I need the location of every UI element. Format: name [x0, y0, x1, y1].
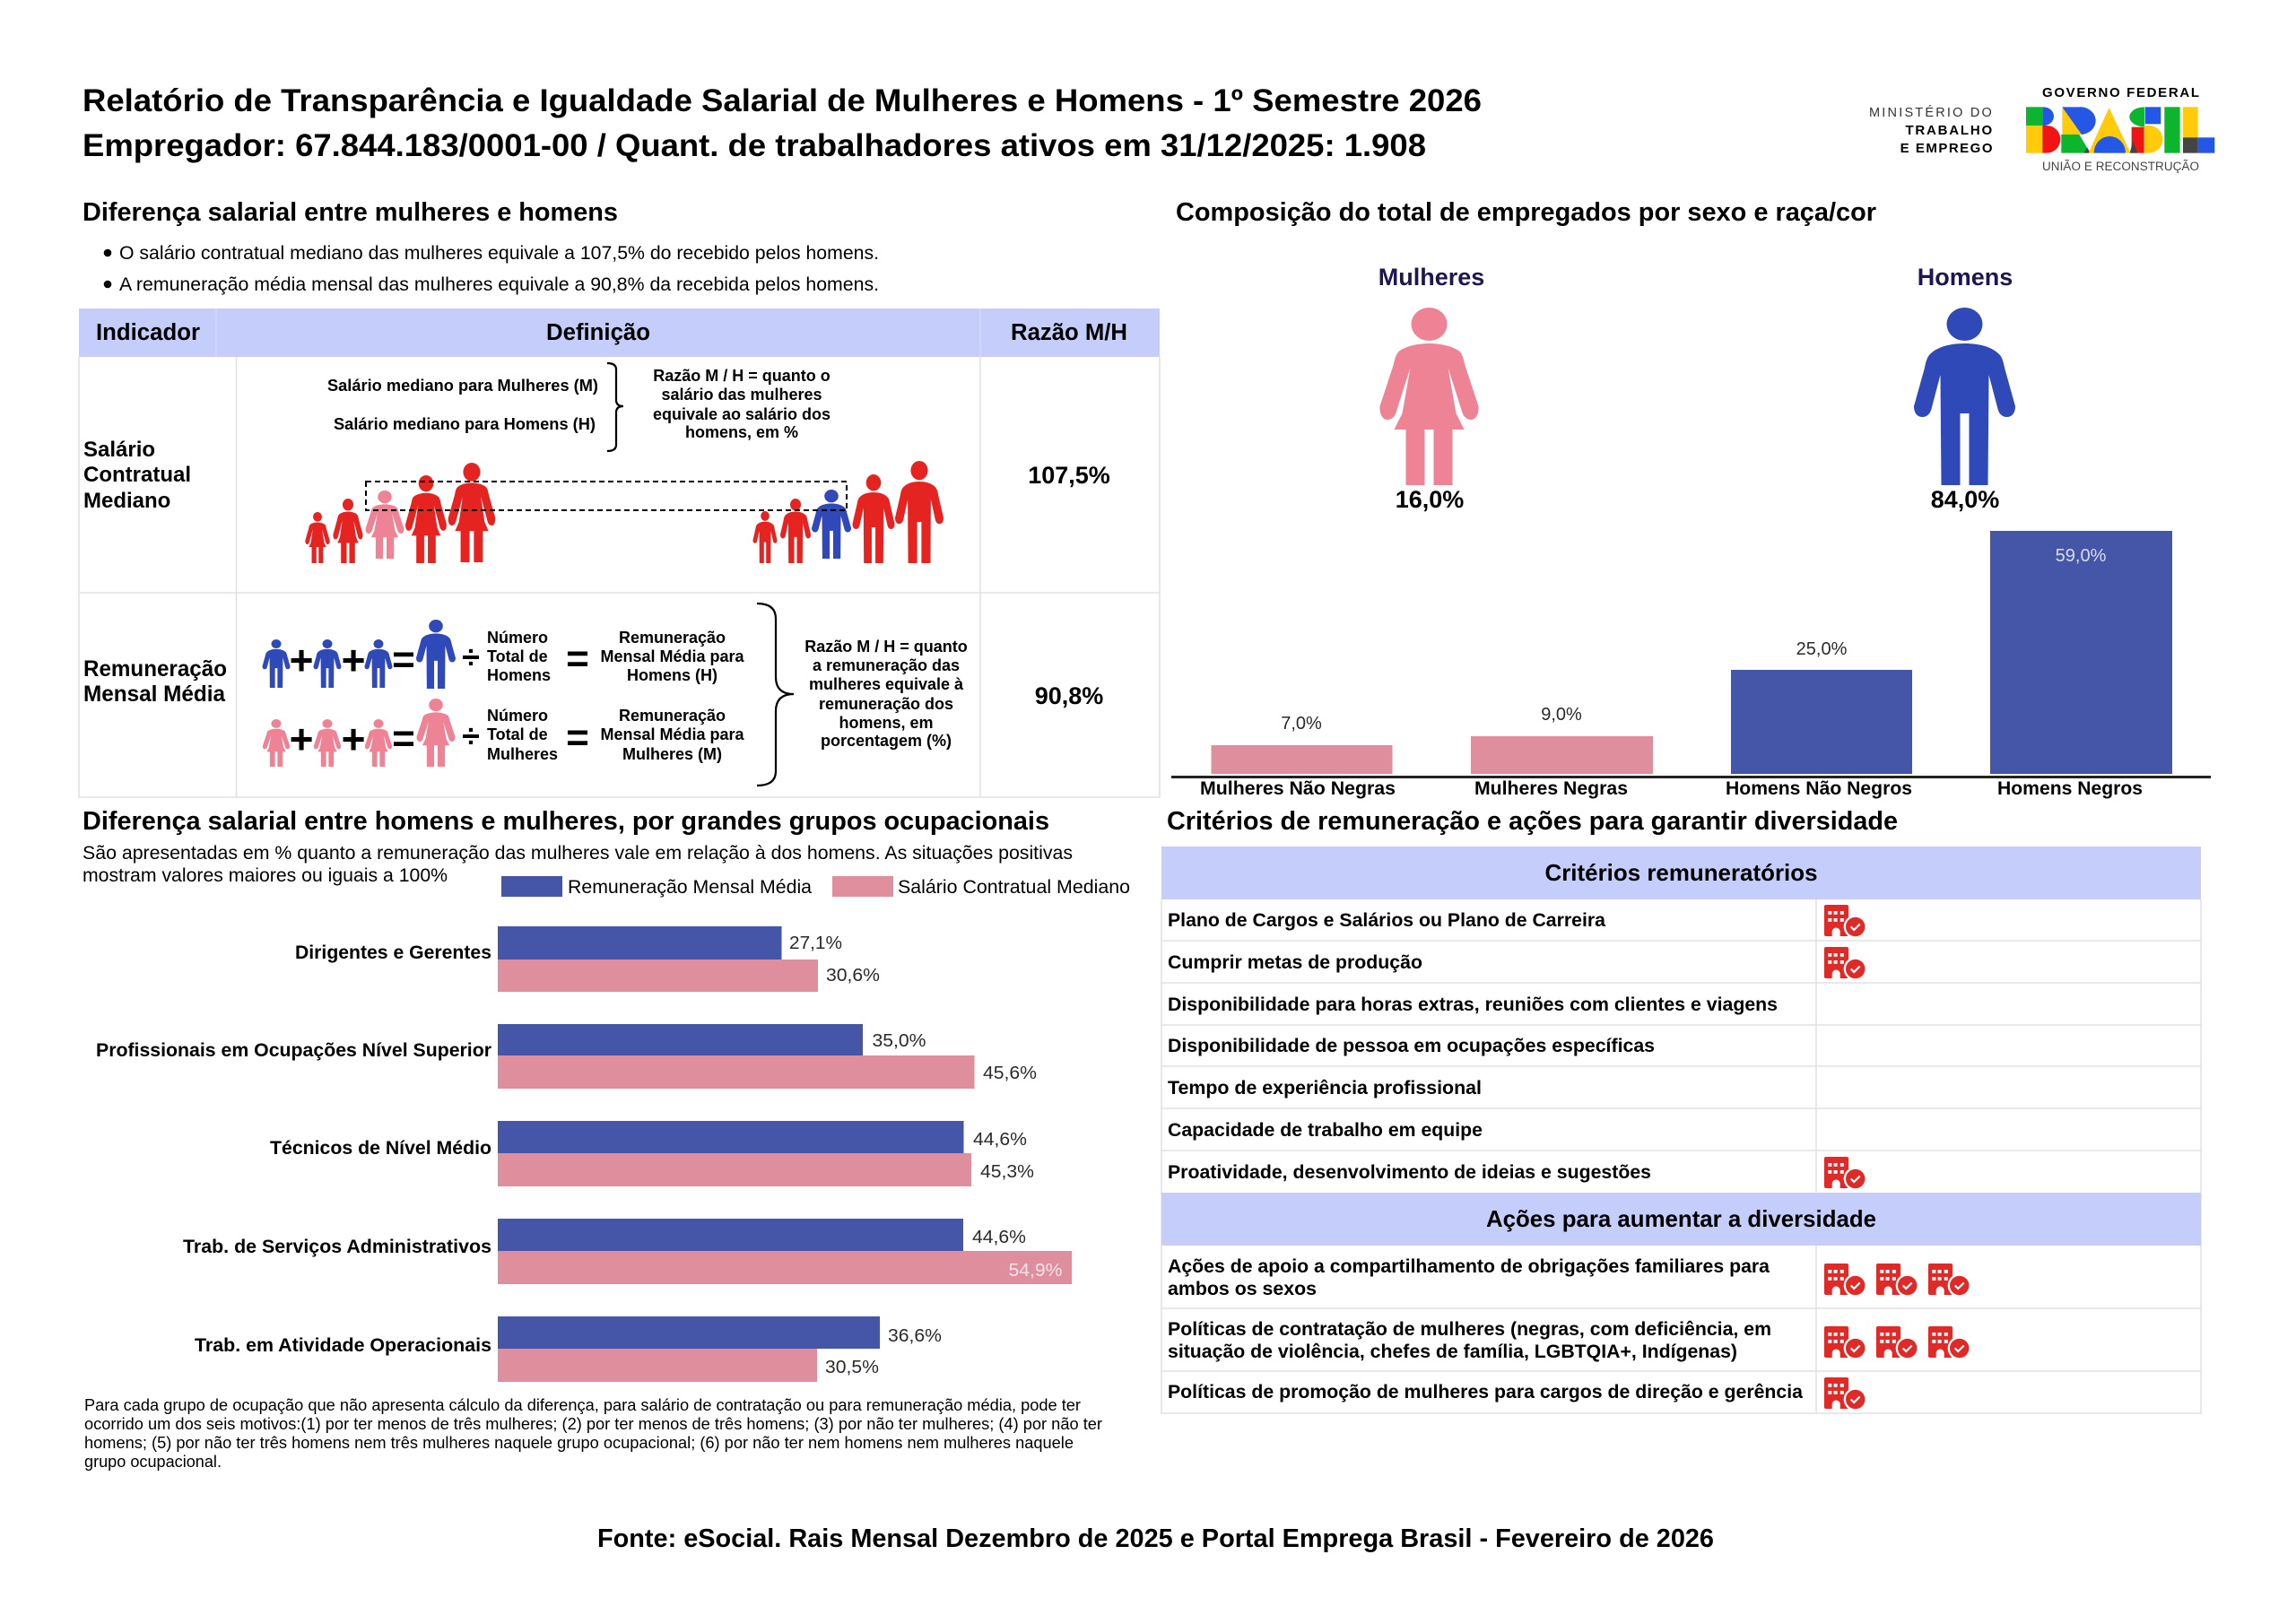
bar chart: composição por raça/cor: 9,0% [1541, 705, 1582, 725]
pictogram: mulheres: Mulheres [1378, 264, 1484, 291]
footnote: Para cada grupo de ocupação que não apresenta cálculo da diferença, para salário de contratação ou para remuneração média, pode ter [84, 1396, 1081, 1414]
row: experiência: Tempo de experiência profissional [1168, 1078, 1482, 1099]
equation: men: = [392, 638, 415, 682]
group: serviços administrativos [183, 1219, 1072, 1284]
bar chart: composição por raça/cor: 25,0% [1796, 639, 1848, 659]
row: metas de produção: Cumprir metas de produção [1168, 952, 1422, 973]
row: plano de cargos: Plano de Cargos e Salários ou Plano de Carreira [1168, 910, 1605, 931]
bar chart: composição por raça/cor: 59,0% [2056, 546, 2107, 566]
row: contratação: situação de violência, chefes de família, LGBTQIA+, Indígenas) [1168, 1342, 1737, 1362]
equation: women: = [392, 716, 415, 760]
ratio explanation: remuneration [804, 638, 968, 750]
pictogram: homens: Homens [1918, 264, 2013, 291]
logo: Ministério do Trabalho e Emprego [1869, 105, 1994, 156]
row: horas extras: Disponibilidade para horas extras, reuniões com clientes e viagens [1168, 994, 1778, 1015]
header: critérios remuneratórios: Critérios remuneratórios [1544, 859, 1817, 886]
equation: women: ÷ [462, 717, 480, 754]
group: técnicos: Técnicos de Nível Médio [270, 1137, 491, 1159]
legend: Remuneração Mensal Média [568, 877, 812, 898]
panel: critérios table [1161, 847, 2201, 1413]
logo: Ministério do Trabalho e Emprego: MINISTÉRIO DO [1869, 105, 1994, 120]
chart description [83, 843, 1073, 886]
equation: men: Homens [487, 666, 551, 684]
equation: women: Total de [487, 725, 548, 743]
title: Relatório de Transparência e Igualdade Salarial de Mulheres e Homens - 1º Semestre 2026 [83, 83, 1482, 118]
ratio explanation: salary: equivale ao salário dos [653, 405, 831, 423]
row label: salário contratual mediano: Mediano [83, 489, 170, 513]
equation: women: + [342, 716, 365, 762]
group: dirigentes e gerentes: 30,6% [826, 966, 880, 986]
pictogram: homens: 84,0% [1931, 486, 1999, 513]
group: atividade operacionais: 30,5% [825, 1358, 879, 1377]
equation: men: + [342, 637, 365, 683]
equation: men: ÷ [462, 638, 480, 675]
footnote: grupo ocupacional. [84, 1453, 222, 1471]
ratio explanation: remuneration: homens, em [839, 714, 934, 732]
dashed median highlight [366, 482, 847, 510]
summary bullets: A remuneração média mensal das mulheres equivale a 90,8% da recebida pelos homens. [119, 274, 879, 295]
row: promoção [1168, 1377, 1867, 1411]
row: ocupações específicas: Disponibilidade de pessoa em ocupações específicas [1168, 1036, 1655, 1056]
equation: men: Total de [487, 647, 548, 665]
icons: women median line-up [305, 463, 495, 563]
group: atividade operacionais: 36,6% [888, 1326, 942, 1346]
heading: critérios: Critérios de remuneração e ações para garantir diversidade [1167, 807, 1898, 836]
bar chart: composição por raça/cor [1171, 531, 2211, 799]
row label: remuneração mensal média: Remuneração [83, 656, 227, 682]
bar chart: grupos ocupacionais [96, 926, 1072, 1382]
row: proatividade: Proatividade, desenvolvimento de ideias e sugestões [1168, 1162, 1651, 1183]
equation: men: + [290, 637, 313, 683]
ratio explanation: remuneration: a remuneração das [813, 656, 960, 674]
value: 90,8%: 90,8% [1035, 682, 1103, 709]
table header: Definição [546, 320, 650, 345]
group: profissionais: 35,0% [872, 1031, 926, 1051]
row label: remuneração mensal média [83, 656, 227, 707]
chart description: mostram valores maiores ou iguais a 100% [83, 865, 448, 886]
equation: women: Número [487, 707, 548, 725]
group: serviços administrativos: 54,9% [1008, 1261, 1063, 1281]
median definition labels [327, 377, 598, 433]
ratio explanation: remuneration: porcentagem (%) [821, 732, 952, 750]
title [83, 83, 1482, 163]
panel: indicator table [79, 308, 1160, 797]
legend [501, 876, 1130, 898]
source footer: Fonte: eSocial. Rais Mensal Dezembro de 2025 e Portal Emprega Brasil - Fevereiro de 2026 [597, 1524, 1714, 1553]
logo: Ministério do Trabalho e Emprego: E EMPREGO [1900, 141, 1994, 156]
chart description: São apresentadas em % quanto a remuneração das mulheres vale em relação à dos homens. As situações positivas [83, 843, 1073, 864]
header: ações [1161, 1193, 2201, 1246]
row: metas de produção [1168, 947, 1867, 981]
title: Empregador: 67.844.183/0001-00 / Quant. de trabalhadores ativos em 31/12/2025: 1.908 [83, 127, 1426, 163]
footnote [84, 1396, 1102, 1471]
row label: salário contratual mediano: Contratual [83, 463, 191, 487]
logo: Governo Federal Brasil [2026, 85, 2214, 173]
equation: men: Homens (H) [627, 666, 718, 684]
row label: salário contratual mediano: Salário [83, 438, 155, 462]
group: serviços administrativos: 44,6% [972, 1228, 1026, 1247]
logo: Governo Federal Brasil: GOVERNO FEDERAL [2042, 85, 2199, 100]
row: contratação [1168, 1319, 1971, 1362]
header: ações: Ações para aumentar a diversidade [1486, 1205, 1876, 1232]
equation: men: = [566, 637, 589, 681]
row: obrigações familiares: ambos os sexos [1168, 1279, 1317, 1299]
equation: women: Remuneração [619, 707, 726, 725]
equation: women [263, 699, 745, 767]
footnote: homens; (5) por não ter três homens nem três mulheres naquele grupo ocupacional; (6) por não ter nem homens nem mulheres naquele [84, 1434, 1074, 1452]
equation: women: Mulheres (M) [622, 745, 722, 763]
equation: women: Mulheres [487, 745, 558, 763]
row: proatividade [1168, 1157, 1867, 1191]
group: dirigentes e gerentes: Dirigentes e Gerentes [295, 942, 491, 963]
summary bullets: O salário contratual mediano das mulheres equivale a 107,5% do recebido pelos homens. [119, 243, 879, 264]
value: 107,5%: 107,5% [1028, 462, 1110, 489]
row: trabalho em equipe: Capacidade de trabalho em equipe [1168, 1120, 1483, 1141]
ratio explanation: salary [653, 367, 831, 441]
table header: Indicador [96, 320, 200, 345]
equation: women: + [290, 716, 313, 762]
brace: remuneration [757, 604, 794, 786]
equation: women: = [566, 716, 589, 760]
ratio explanation: remuneration: remuneração dos [819, 695, 953, 713]
ratio explanation: remuneration: mulheres equivale à [809, 675, 964, 693]
equation: men: Remuneração [619, 629, 726, 647]
row: obrigações familiares [1168, 1256, 1971, 1299]
row: plano de cargos [1168, 905, 1867, 938]
pictogram: homens [1914, 264, 2015, 513]
summary bullets [104, 243, 879, 295]
ratio explanation: remuneration: Razão M / H = quanto [804, 638, 968, 656]
group: serviços administrativos: Trab. de Serviços Administrativos [183, 1236, 491, 1257]
heading: diferença salarial: Diferença salarial entre mulheres e homens [83, 198, 618, 227]
bar chart: composição por raça/cor: Homens Negros [1997, 778, 2143, 799]
row: promoção: Políticas de promoção de mulheres para cargos de direção e gerência [1168, 1382, 1803, 1403]
equation: men: Mensal Média para [600, 647, 745, 665]
bar chart: composição por raça/cor: 7,0% [1281, 714, 1322, 734]
group: dirigentes e gerentes [295, 926, 880, 992]
table header [79, 308, 1160, 357]
row label: remuneração mensal média: Mensal Média [83, 682, 226, 707]
equation: men [262, 620, 745, 689]
legend: Salário Contratual Mediano [898, 877, 1130, 898]
bar chart: composição por raça/cor: Homens Não Negros [1726, 778, 1912, 799]
ratio explanation: salary: salário das mulheres [661, 386, 822, 404]
median definition labels: Salário mediano para Homens (H) [334, 415, 596, 433]
row label: salário contratual mediano [83, 438, 191, 513]
group: técnicos [270, 1121, 1034, 1186]
logo: Governo Federal Brasil: UNIÃO E RECONSTRUÇÃO [2042, 160, 2199, 173]
bar chart: composição por raça/cor: Mulheres Não Negras [1200, 778, 1396, 799]
group: atividade operacionais [195, 1316, 942, 1382]
group: técnicos: 45,3% [980, 1162, 1034, 1182]
pictogram: mulheres [1378, 264, 1484, 513]
group: profissionais: Profissionais em Ocupações Nível Superior [96, 1039, 492, 1061]
equation: women: Mensal Média para [600, 725, 745, 743]
ratio explanation: salary: Razão M / H = quanto o [653, 367, 831, 385]
group: profissionais [96, 1024, 1037, 1089]
median definition labels: Salário mediano para Mulheres (M) [327, 377, 598, 395]
header: critérios remuneratórios [1161, 847, 2201, 899]
footnote: ocorrido um dos seis motivos:(1) por ter menos de três mulheres; (2) por ter menos de três homens; (3) por não ter mulheres; (4) por não ter [84, 1415, 1102, 1433]
logo: Ministério do Trabalho e Emprego: TRABALHO [1905, 123, 1994, 138]
group: profissionais: 45,6% [983, 1064, 1037, 1083]
ratio explanation: salary: homens, em % [685, 423, 798, 441]
row: contratação: Políticas de contratação de mulheres (negras, com deficiência, em [1168, 1319, 1771, 1340]
brace: median [607, 363, 623, 451]
heading: composição: Composição do total de empregados por sexo e raça/cor [1176, 198, 1876, 227]
group: atividade operacionais: Trab. em Atividade Operacionais [195, 1334, 491, 1356]
group: técnicos: 44,6% [973, 1130, 1027, 1150]
bar chart: composição por raça/cor: Mulheres Negras [1474, 778, 1628, 799]
table header: Razão M/H [1011, 320, 1127, 345]
icons: men median line-up [753, 461, 944, 563]
pictogram: mulheres: 16,0% [1396, 486, 1464, 513]
group: dirigentes e gerentes: 27,1% [789, 934, 842, 953]
heading: grupos ocupacionais: Diferença salarial entre homens e mulheres, por grandes grupos ocupacionais [83, 807, 1049, 836]
equation: men: Número [487, 629, 548, 647]
row: obrigações familiares: Ações de apoio a compartilhamento de obrigações familiares para [1168, 1256, 1770, 1277]
